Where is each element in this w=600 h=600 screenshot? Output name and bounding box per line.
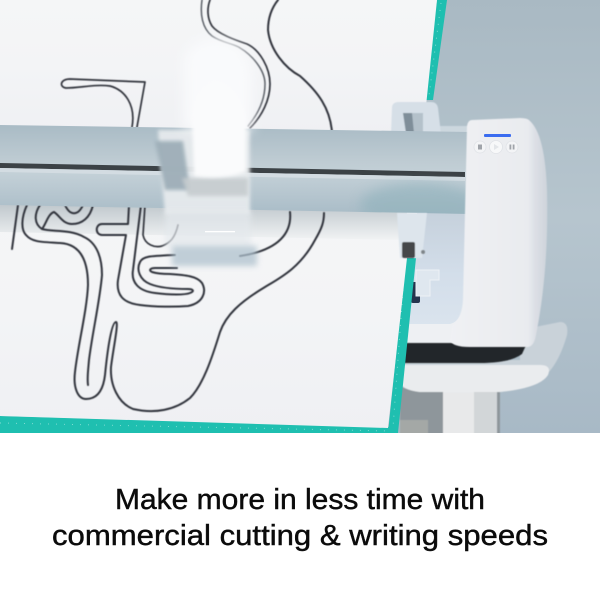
right outline upper (268, 0, 332, 132)
white base (400, 312, 470, 345)
dark base (404, 343, 527, 363)
cut lines (12, 0, 332, 411)
hook (61, 79, 145, 127)
buttons (474, 141, 486, 153)
rail (0, 125, 467, 214)
inner outline (36, 205, 102, 385)
t loop (97, 205, 204, 307)
photo background (0, 0, 600, 434)
teal mat upper (423, 0, 447, 100)
upper double line (208, 0, 270, 128)
blurred cutting head (155, 38, 257, 266)
side clip (411, 282, 420, 303)
teal mat lower (388, 258, 416, 433)
caption: Make more in less time with (115, 484, 485, 516)
paper upper (0, 0, 437, 135)
left stub (12, 205, 18, 249)
mat and paper (0, 0, 447, 433)
paper holder (391, 102, 469, 136)
cutter body (395, 205, 527, 363)
machine interior (395, 205, 470, 345)
s loop (133, 205, 193, 294)
white caption band (0, 433, 600, 600)
right arc (240, 212, 290, 256)
caption (52, 484, 548, 552)
long outline (22, 205, 324, 411)
upper loops (42, 205, 93, 229)
paper lower (0, 200, 420, 428)
caption: commercial cutting & writing speeds (52, 520, 548, 552)
control panel (450, 118, 547, 347)
rail shadow on paper (0, 204, 407, 240)
lower clip and roller (397, 213, 427, 258)
u loop (143, 205, 178, 247)
stand (400, 322, 567, 434)
status light (484, 134, 511, 137)
